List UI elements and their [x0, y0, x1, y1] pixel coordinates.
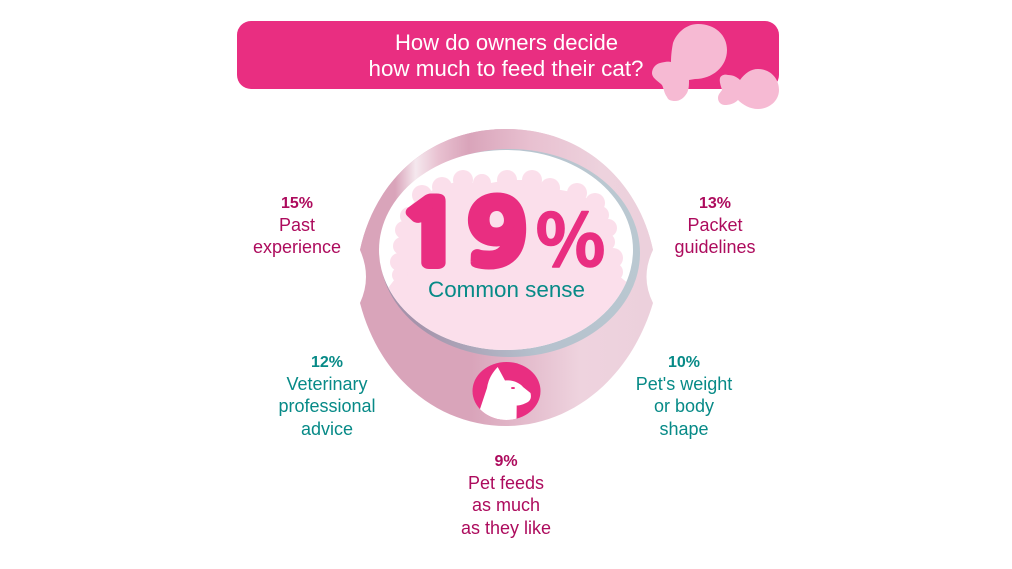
big number 19%: %: [536, 182, 606, 287]
label: common sense: Common sense: [428, 277, 585, 302]
stat: packet guidelines: Packet: [687, 215, 743, 235]
stat: pet feeds as much as they like: [461, 453, 551, 538]
icon: cat: [472, 362, 540, 422]
big number 19%: 1: [398, 192, 464, 276]
stat: pet feeds as much as they like: as much: [472, 495, 540, 515]
stat: pet feeds as much as they like: as they like: [461, 518, 551, 538]
stat: packet guidelines: 13%: [699, 195, 731, 212]
stat: veterinary professional advice: advice: [301, 419, 353, 439]
icon: large fish: [652, 24, 727, 101]
stat: veterinary professional advice: professional: [278, 396, 376, 416]
bowl interior: [379, 150, 633, 350]
stat: packet guidelines: guidelines: [674, 237, 756, 257]
stat: veterinary professional advice: Veterinary: [286, 374, 368, 394]
stat: pet's weight or body shape: [636, 354, 732, 439]
bowl: [360, 129, 653, 426]
stat: pet's weight or body shape: Pet's weight: [636, 374, 732, 394]
bowl rim shadow: [380, 149, 640, 357]
stat: veterinary professional advice: [278, 354, 376, 439]
stat: past experience: Past: [279, 215, 315, 235]
title: how much to feed their cat?: [368, 56, 644, 81]
stat: pet's weight or body shape: or body: [654, 396, 714, 416]
big number 19%: 9: [468, 192, 526, 276]
title: How do owners decide: [395, 30, 618, 55]
stat: packet guidelines: [674, 195, 756, 257]
icon: small fish: [718, 69, 779, 109]
title banner: [237, 21, 779, 89]
stat: pet's weight or body shape: shape: [659, 419, 709, 439]
stat: veterinary professional advice: 12%: [311, 354, 343, 371]
title: [368, 30, 644, 81]
stat: past experience: experience: [253, 237, 341, 257]
stat: past experience: 15%: [281, 195, 313, 212]
stat: pet feeds as much as they like: Pet feeds: [468, 473, 544, 493]
cat food: [388, 170, 626, 350]
stat: pet feeds as much as they like: 9%: [494, 453, 518, 470]
big number 19%: [398, 182, 606, 287]
stat: pet's weight or body shape: 10%: [668, 354, 700, 371]
stat: past experience: [253, 195, 341, 257]
